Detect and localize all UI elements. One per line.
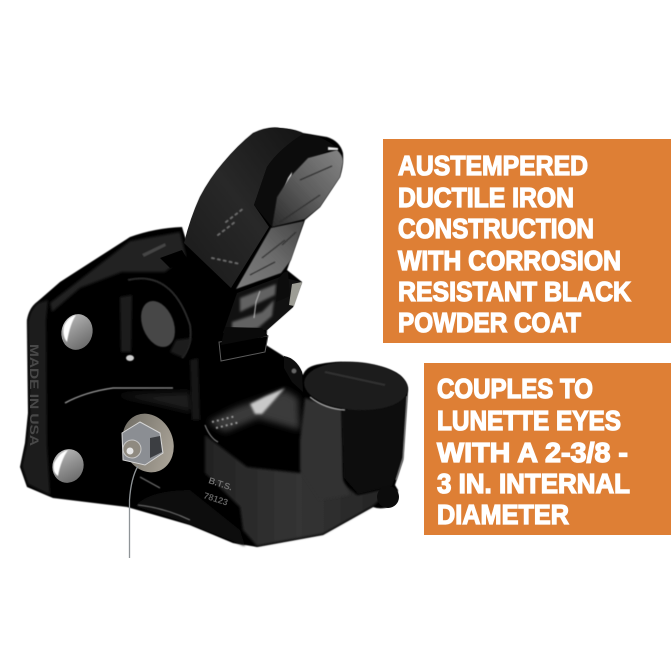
- cap rim: [310, 397, 345, 410]
- hole wall: [48, 445, 88, 487]
- center vertical rib: [120, 295, 132, 352]
- embossed casting marks: 78123: [202, 490, 229, 508]
- hook latch: [184, 128, 343, 361]
- cylinder cap: [302, 358, 410, 414]
- callout text: RESISTANT BLACK: [398, 276, 631, 307]
- nut dark facet: [150, 436, 162, 458]
- cotter wire: [130, 466, 138, 558]
- rear bump: [377, 486, 399, 508]
- embossed casting marks: B.T.S.: [207, 475, 234, 492]
- latch rim band: [254, 134, 337, 227]
- hole see-through: [54, 450, 68, 476]
- callout text: WITH A 2-3/8 -: [437, 437, 628, 468]
- hook body silhouette: [20, 128, 408, 547]
- neck band: [223, 277, 302, 333]
- latch face: [272, 150, 343, 227]
- plate pocket shadow: [160, 250, 190, 268]
- callout text: WITH CORROSION: [398, 245, 621, 276]
- washer: [114, 406, 182, 480]
- cylinder right edge highlight: [396, 396, 407, 480]
- crease shadow band: [115, 392, 192, 412]
- cylinder dark right: [342, 394, 406, 494]
- upper mount hole: [57, 311, 97, 353]
- callout text: DUCTILE IRON: [398, 182, 574, 213]
- face streaks: [250, 166, 332, 275]
- cylinder gloss left: [300, 398, 350, 500]
- callout text: LUNETTE EYES: [437, 405, 621, 436]
- hole wall: [57, 311, 97, 353]
- small shoulder glints: [126, 355, 134, 361]
- speckles on latch back: [212, 208, 244, 264]
- icon: black pintle hook product: [20, 128, 410, 558]
- callout text: [437, 373, 630, 530]
- rim glint: [283, 147, 338, 191]
- cotter pin head: [126, 448, 134, 454]
- callout text: 3 IN. INTERNAL: [437, 468, 630, 499]
- lower face: [236, 221, 304, 289]
- slot inner dark: [221, 327, 268, 345]
- callout text: AUSTEMPERED: [398, 150, 588, 181]
- latch bolt recess rim: [128, 278, 191, 358]
- callout text: CONSTRUCTION: [398, 213, 594, 244]
- hex nut: [122, 422, 163, 465]
- neck crack: [254, 291, 260, 318]
- neck stripes: [232, 284, 276, 334]
- left rim band: [22, 300, 50, 495]
- panel: lunette eye callout: [424, 363, 671, 535]
- nut and washer assembly: [114, 406, 182, 480]
- throat white glint: [250, 388, 285, 414]
- bolt edge: [170, 338, 192, 358]
- rear stud: [284, 356, 303, 392]
- latch bolt head: [135, 296, 181, 352]
- embossed casting marks: [202, 475, 234, 508]
- embossed MADE IN USA: MADE IN USA: [27, 344, 41, 446]
- callout text: DIAMETER: [437, 499, 569, 530]
- hole see-through: [63, 315, 76, 342]
- lock collar: [123, 440, 141, 458]
- crease across plate: [65, 388, 173, 403]
- nose cylinder: [284, 356, 410, 508]
- throat speckle: [212, 416, 240, 428]
- cast throat texture: [208, 390, 300, 432]
- callout text: [398, 150, 631, 338]
- lower body gloss: [205, 403, 393, 546]
- pin washer: [289, 282, 302, 306]
- plate top glints: [142, 243, 166, 257]
- latch back: [184, 128, 303, 288]
- lower mount hole: [48, 445, 88, 487]
- cap streak: [325, 372, 385, 385]
- slot: [219, 336, 268, 361]
- panel background: [383, 139, 671, 343]
- panel: construction callout: [383, 139, 671, 343]
- stud glint: [292, 368, 296, 374]
- panel background: [424, 363, 671, 535]
- bottom edge glints: [138, 477, 190, 520]
- dark bottom shadow: [135, 490, 245, 546]
- top plate sheen: [50, 232, 186, 312]
- throat lower edge: [205, 425, 218, 442]
- callout text: POWDER COAT: [398, 307, 581, 338]
- callout text: COUPLES TO: [437, 373, 593, 404]
- right vertical rib: [190, 358, 200, 420]
- pin tip: [276, 272, 290, 302]
